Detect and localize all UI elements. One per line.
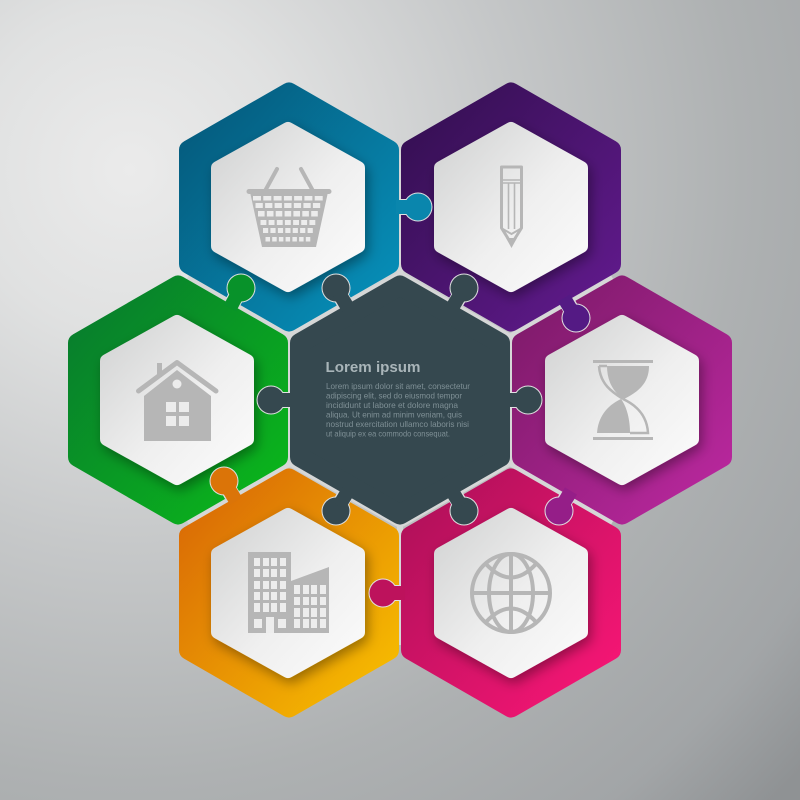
body copy: adipiscing elit, sed do eiusmod tempor	[326, 390, 462, 400]
inner white hexagon: globe	[441, 515, 581, 671]
body copy: ut aliquip ex ea commodo consequat.	[326, 428, 450, 438]
hexagon: teal segment	[189, 92, 389, 322]
body copy: nostrud exercitation ullamco laboris nisi	[326, 419, 469, 429]
icon: house	[138, 362, 216, 441]
inner white hexagon: basket	[218, 129, 358, 285]
hexagon: purple segment	[411, 92, 611, 322]
puzzle tab: teal into purple	[396, 192, 432, 222]
hexagon: magenta segment	[522, 286, 722, 514]
inner white hexagon: pencil	[441, 129, 581, 285]
central text block	[326, 360, 470, 438]
inner white hexagon: house	[107, 322, 247, 478]
body copy: incididunt ut labore et dolore magna	[326, 400, 458, 410]
body copy	[326, 381, 470, 438]
inner white hexagon: hourglass	[552, 322, 692, 478]
icon: hourglass	[593, 360, 653, 440]
hexagon: central dark panel	[300, 286, 500, 514]
hexagon: pink segment	[411, 478, 611, 708]
inner white hexagon: building	[218, 515, 358, 671]
puzzle tab: magenta into pink	[544, 491, 574, 526]
puzzle tab: purple into magenta	[562, 298, 590, 332]
puzzle tab: dark into magenta	[506, 386, 542, 414]
icon: globe	[472, 554, 550, 632]
hexagon: orange segment	[189, 478, 389, 708]
puzzle tab: green into teal	[226, 274, 256, 308]
puzzle tab: orange into green	[210, 466, 238, 501]
body copy: Lorem ipsum dolor sit amet, consectetur	[326, 381, 470, 391]
icon: pencil	[501, 167, 522, 248]
heading: Lorem ipsum	[326, 360, 420, 376]
icon: office buildings	[248, 552, 329, 633]
body copy: aliqua. Ut enim ad minim veniam, quis	[326, 410, 462, 420]
icon: shopping basket	[249, 169, 329, 247]
puzzle tab: dark into green	[256, 386, 294, 414]
puzzle tab: dark into orange	[322, 491, 350, 526]
puzzle tab: pink into orange	[368, 578, 405, 608]
puzzle tab: dark into pink	[450, 491, 478, 526]
hexagon: green segment	[78, 286, 278, 514]
puzzle tab: dark into teal	[322, 274, 350, 308]
puzzle tab: dark into purple	[450, 274, 478, 308]
